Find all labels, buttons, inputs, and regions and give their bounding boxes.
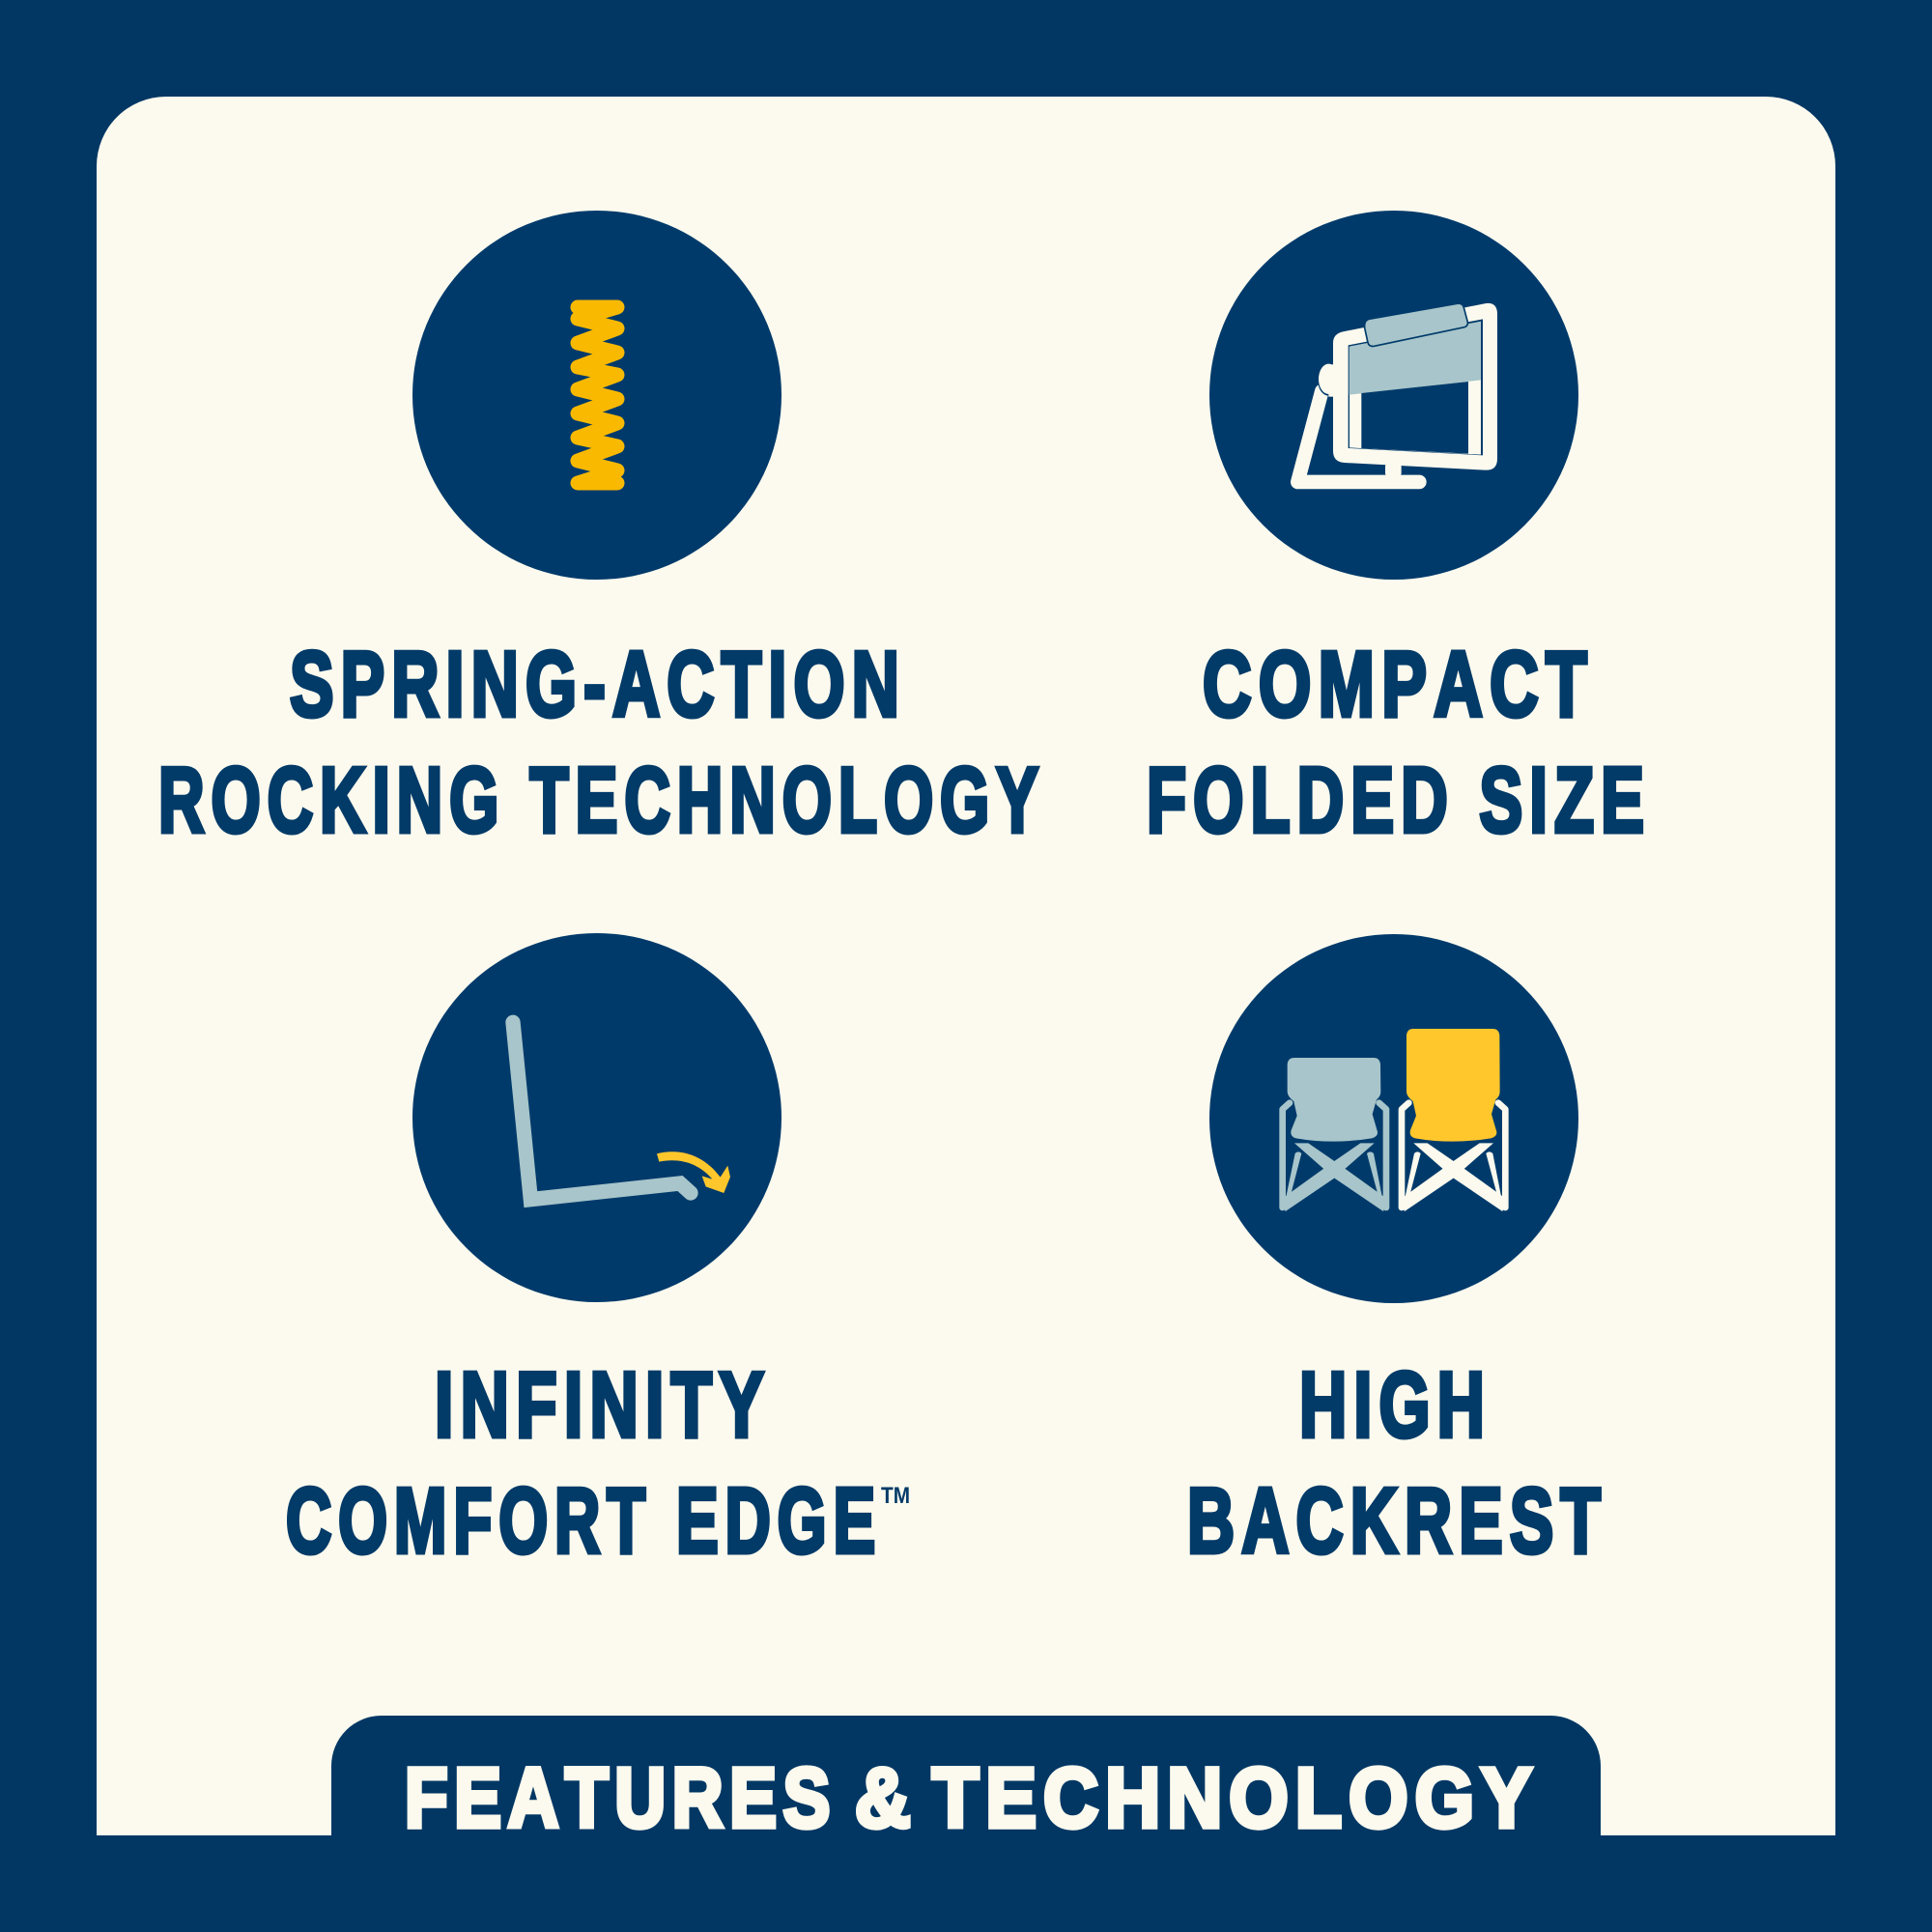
heading: compact: COMPACT (1203, 633, 1594, 736)
icon: folded chair (1297, 303, 1497, 482)
icon: spring (578, 307, 617, 483)
arrow (657, 1151, 730, 1193)
heading: compact: FOLDED SIZE (1147, 749, 1651, 852)
circle: high backrest icon (1209, 934, 1578, 1303)
title tab (331, 1716, 1601, 1845)
circle: comfort edge icon (412, 933, 781, 1302)
heading: infinity comfort edge (286, 1353, 910, 1573)
icon: two chairs (1281, 1029, 1507, 1211)
heading: high backrest: HIGH (1299, 1353, 1492, 1457)
icon: seat edge (513, 1022, 730, 1200)
heading: infinity comfort edge: COMFORT EDGE (286, 1469, 882, 1573)
title: features & technology: & (855, 1751, 918, 1845)
heading: infinity comfort edge: INFINITY (435, 1353, 771, 1457)
heading: spring-action: SPRING-ACTION (290, 633, 906, 736)
title: features & technology: TECHNOLOGY (932, 1751, 1539, 1845)
title: features & technology: FEATURES (405, 1751, 837, 1845)
heading: spring-action: ROCKING TECHNOLOGY (158, 749, 1045, 852)
heading: high backrest (1187, 1353, 1607, 1573)
heading: infinity comfort edge: TM (881, 1483, 910, 1509)
heading: spring-action (158, 633, 1045, 852)
circle: compact icon (1209, 211, 1578, 580)
circle: spring icon (412, 211, 781, 580)
title: features & technology (405, 1751, 1539, 1845)
heading: high backrest: BACKREST (1187, 1469, 1607, 1573)
heading: compact (1147, 633, 1651, 852)
chair: standard (1281, 1058, 1388, 1211)
knob (1318, 364, 1343, 397)
chair: high back (1400, 1029, 1507, 1211)
